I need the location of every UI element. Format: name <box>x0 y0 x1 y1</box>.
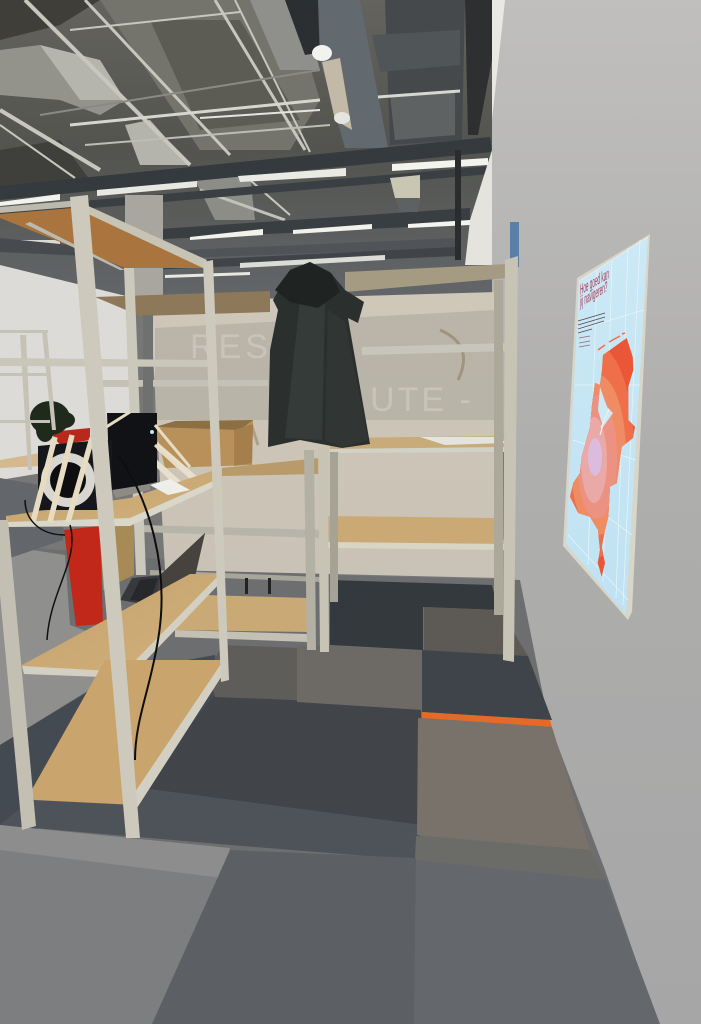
floor: light concrete left <box>0 545 118 745</box>
floor: front light tile <box>0 825 230 1024</box>
plant <box>30 401 75 442</box>
laptop shelf <box>22 574 222 674</box>
ceiling <box>0 0 503 300</box>
cable reel <box>33 412 190 522</box>
bottom shelf <box>30 660 226 805</box>
paper note <box>150 479 190 495</box>
floor: dark strip left <box>0 655 222 830</box>
red column <box>50 428 134 626</box>
back unit posts <box>143 256 518 662</box>
back shelf panel <box>150 292 497 578</box>
cables <box>118 455 162 760</box>
ceiling beams and lights <box>0 137 492 300</box>
floor: front carpet middle <box>152 850 416 1024</box>
floor: back dark tiles <box>330 580 498 650</box>
upright posts <box>70 195 140 838</box>
laptop <box>120 533 205 606</box>
ceiling duct <box>285 0 503 148</box>
third shelf: with reel <box>6 469 220 527</box>
floor: dark tile with orange strip <box>422 650 552 727</box>
floor: back concrete <box>208 645 300 700</box>
top shelf <box>0 207 205 268</box>
Netherlands map <box>570 338 635 577</box>
rear post <box>124 268 146 575</box>
poster with Netherlands map <box>562 234 650 620</box>
coat on shelf <box>268 262 370 448</box>
right wall <box>492 0 701 1024</box>
poster title: Hoe goed kan <box>580 266 609 299</box>
poster body lines <box>578 313 605 347</box>
floor: central dark carpet <box>140 695 421 825</box>
floor: front carpet right <box>414 860 660 1024</box>
left small shelf far <box>0 330 56 470</box>
back left white wall <box>0 265 130 480</box>
poster with Netherlands map: jij navigeren? <box>580 279 607 311</box>
second rail <box>0 358 212 367</box>
grey sofa <box>0 478 64 558</box>
front left shelving unit <box>0 195 229 838</box>
cardboard box <box>155 420 253 488</box>
floor base <box>0 545 658 1024</box>
faint wall lettering: RESE <box>190 328 299 366</box>
back shelf panel: UTE - <box>370 381 474 419</box>
ceiling trusses <box>0 0 460 220</box>
back unit shelves <box>95 264 510 642</box>
floor: concrete tile <box>417 718 590 850</box>
